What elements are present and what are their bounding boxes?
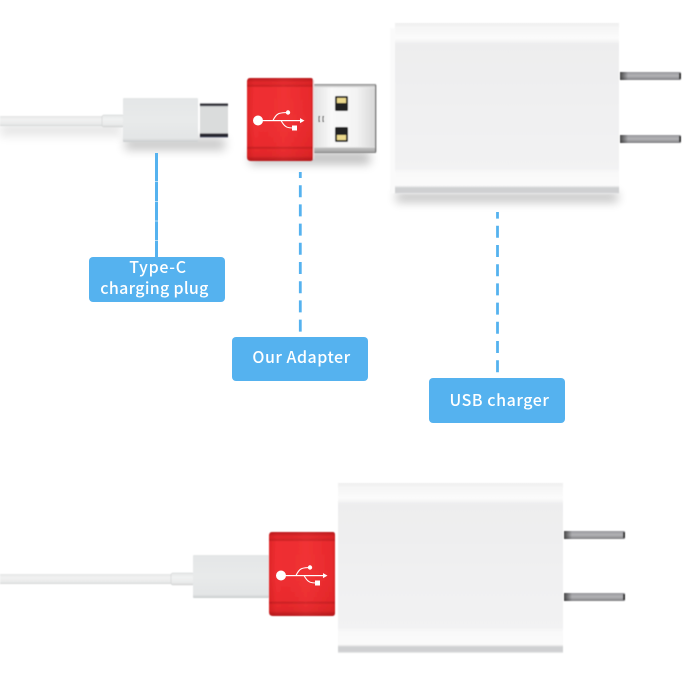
prongs	[620, 72, 681, 143]
USB trident icon	[253, 110, 304, 130]
plug body	[123, 98, 198, 142]
label: Type-C charging plug: charging plug	[100, 275, 209, 299]
label: Type-C charging plug: Type-C	[129, 254, 187, 278]
connector line: charger	[496, 212, 499, 373]
assembled: Type-C cable and plug (bottom)	[0, 555, 269, 598]
label: USB charger	[429, 378, 565, 423]
cable	[0, 116, 103, 126]
Type-C tip	[200, 103, 228, 138]
charger body	[390, 28, 396, 193]
connector line: adapter	[299, 172, 302, 332]
contact windows	[335, 96, 348, 111]
Type-C cable and plug (top)	[0, 98, 228, 150]
red aluminium shell	[247, 78, 313, 161]
strain relief	[102, 115, 124, 127]
USB-A metal connector	[312, 84, 376, 153]
charger body	[338, 483, 563, 653]
label: Our Adapter	[232, 337, 368, 381]
label: Our Adapter: Our Adapter	[252, 344, 351, 368]
assembled: red adapter (bottom)	[269, 532, 335, 616]
assembled: USB charger (bottom)	[338, 483, 625, 653]
connector line: Type-C	[155, 153, 158, 257]
USB trident icon	[276, 565, 328, 586]
label: Type-C charging plug	[89, 254, 225, 302]
label: USB charger: USB charger	[450, 387, 549, 411]
USB charger (top)	[390, 23, 681, 202]
Adapter (top)	[247, 78, 376, 164]
prongs	[564, 531, 625, 601]
